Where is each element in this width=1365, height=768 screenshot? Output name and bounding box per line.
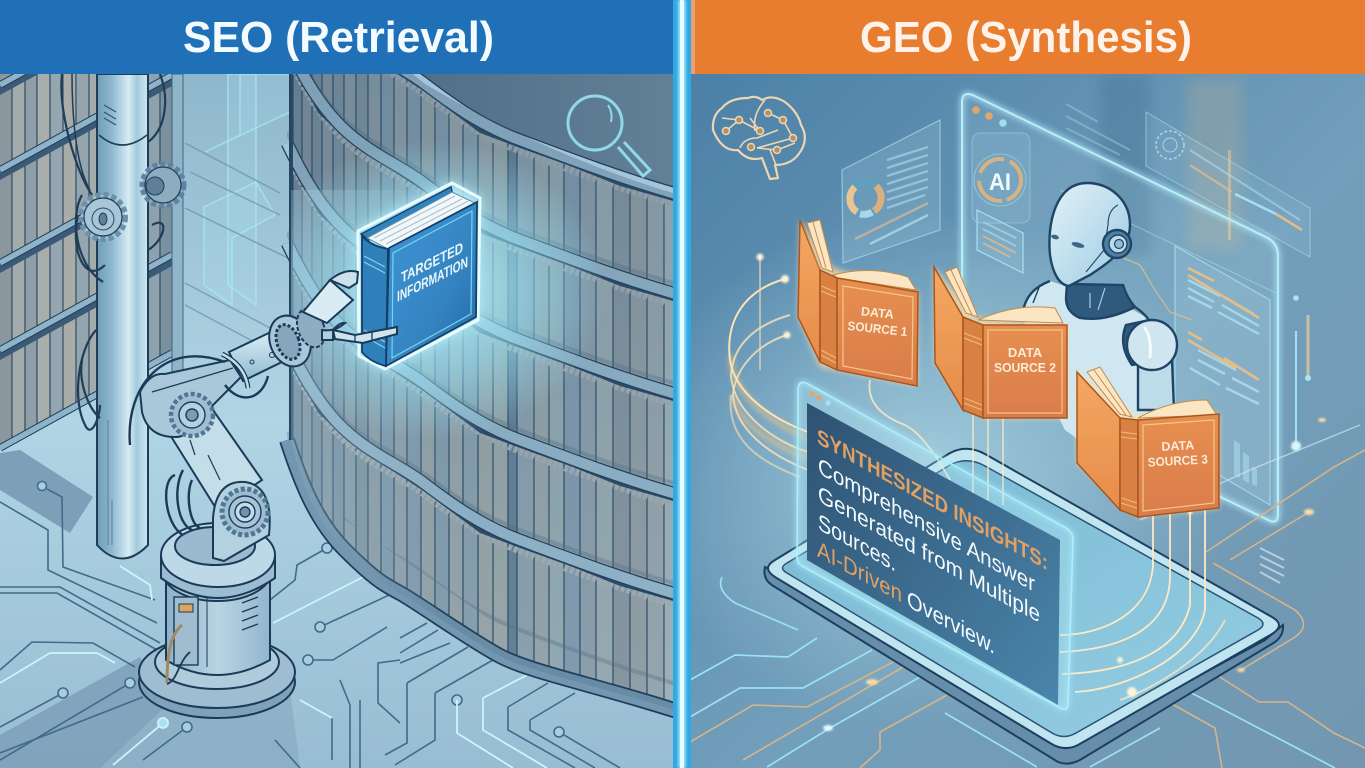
- book 1 label: DATA: [860, 304, 894, 322]
- side indicators: [1291, 295, 1311, 451]
- elbow link: [140, 360, 241, 437]
- book 3 label: [1147, 438, 1208, 470]
- robot neck: [1066, 284, 1135, 319]
- screen text: Sources.: [818, 509, 896, 577]
- glowing flow lines: [869, 380, 1225, 700]
- document text panel: [1175, 246, 1270, 505]
- data source book 3: [1077, 367, 1219, 517]
- robot figure: [1023, 183, 1177, 470]
- AI badge: AI: [989, 169, 1011, 196]
- AI badge: [972, 133, 1030, 223]
- circuit traces: [690, 418, 1365, 768]
- circuit link from robot to panel: [1122, 258, 1192, 321]
- robot arm: [130, 271, 397, 718]
- small note card: [977, 210, 1023, 273]
- drum shading, haze and glow: [291, 74, 673, 710]
- glass screen with synthesized text: [797, 382, 1073, 709]
- data source book 1: [798, 220, 918, 386]
- control panel: [174, 597, 198, 665]
- hand: [303, 271, 397, 343]
- book drum tiers: [279, 74, 673, 718]
- screen text: Overview.: [907, 586, 995, 660]
- book 2 label: DATA: [1008, 345, 1043, 360]
- screen text: Comprehensive Answer: [818, 453, 1035, 598]
- book 3 label: SOURCE 3: [1147, 452, 1208, 470]
- window dots: [972, 106, 1007, 127]
- wrist joints: [268, 314, 312, 368]
- icon: rear gear: [142, 164, 184, 206]
- dark backdrop behind the drum: [422, 74, 673, 186]
- background orange data glow: [1100, 74, 1242, 254]
- drum body: [311, 74, 673, 641]
- left bookshelves: [0, 74, 184, 452]
- book 1 label: [847, 304, 908, 339]
- upper arm: [167, 410, 262, 510]
- background: [690, 74, 1365, 768]
- robot ear: [1103, 230, 1131, 258]
- arm base: [139, 523, 295, 718]
- book label text: TARGETED: [401, 240, 463, 287]
- heading: GEO (Synthesis): [690, 0, 1365, 74]
- panel: SEO retrieval scene: [0, 74, 673, 768]
- floor shadows: [0, 450, 300, 768]
- icon: front gear: [81, 195, 125, 239]
- book 1 label: SOURCE 1: [847, 319, 908, 339]
- heading: GEO (Synthesis): GEO (Synthesis): [860, 13, 1192, 62]
- book 3 label: DATA: [1161, 438, 1195, 454]
- data source book 2: [934, 267, 1067, 418]
- shoulder joint: [213, 482, 270, 561]
- heading: SEO (Retrieval): [0, 0, 673, 74]
- heading: SEO (Retrieval): SEO (Retrieval): [183, 13, 494, 62]
- central divider: [673, 0, 691, 768]
- swirling data streams: [729, 254, 808, 477]
- screen text: [817, 423, 1048, 660]
- book label text: INFORMATION: [397, 254, 468, 306]
- secondary top panel: [1146, 112, 1310, 257]
- targeted information book: [358, 182, 480, 370]
- floor and wall background: [0, 74, 673, 768]
- main holographic panel: [962, 94, 1280, 522]
- screen text: SYNTHESIZED INSIGHTS:: [817, 423, 1048, 575]
- pillar with gears and cables: [61, 74, 184, 558]
- hologram shapes on wall: [204, 74, 290, 305]
- glowing traces: [0, 566, 547, 768]
- small chart panel: [842, 120, 940, 263]
- robot head: [1049, 183, 1130, 286]
- book label text: [398, 244, 468, 302]
- circuit traces on floor: [0, 482, 620, 768]
- book 2 label: [994, 345, 1056, 375]
- robot arm: [1138, 360, 1174, 410]
- window dots: [809, 391, 831, 406]
- robot torso: [1023, 281, 1160, 470]
- icon: brain: [713, 97, 805, 179]
- wall lines: [185, 143, 288, 345]
- screen text: Generated from Multiple: [818, 481, 1040, 629]
- screen text: AI-Driven: [817, 536, 902, 608]
- tablet base: [764, 449, 1283, 764]
- icon: magnifying glass: [568, 96, 650, 176]
- book 2 label: SOURCE 2: [994, 360, 1056, 375]
- forearm: [229, 331, 286, 381]
- panel: GEO synthesis scene: [630, 74, 1365, 768]
